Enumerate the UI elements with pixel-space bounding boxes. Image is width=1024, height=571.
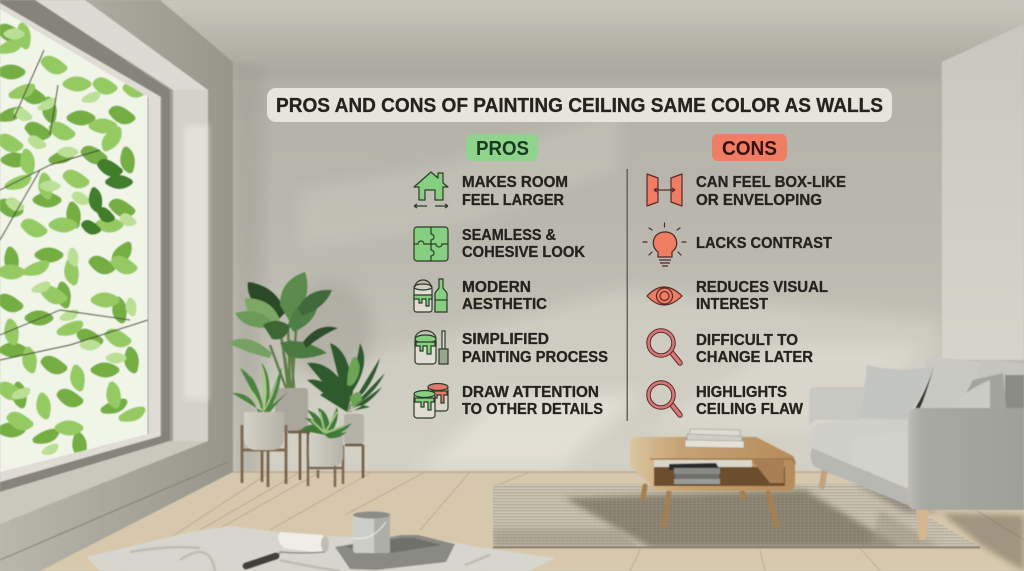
shelf books	[669, 463, 720, 484]
window recess top reveal	[35, 0, 208, 90]
con item: reduces visual interest	[647, 279, 828, 313]
pro item: seamless and cohesive look	[414, 227, 586, 261]
front arm and body	[908, 408, 1024, 510]
con item: reduces visual interest: REDUCES VISUAL	[696, 279, 828, 296]
icon: eye	[647, 287, 682, 305]
rug	[493, 484, 980, 548]
pro item: modern aesthetic	[414, 279, 547, 313]
panel: pros	[414, 134, 608, 418]
icon: light bulb	[643, 223, 686, 266]
paint roller	[246, 532, 329, 566]
icon: two paint cans	[414, 384, 448, 418]
con item: can feel box-like or enveloping: CAN FEEL BOX-LIKE	[696, 174, 846, 191]
front plant on stand	[300, 407, 352, 487]
con item: can feel box-like or enveloping: OR ENVELOPING	[696, 192, 822, 209]
title banner	[267, 88, 892, 122]
panel: cons	[643, 134, 846, 418]
left wall	[0, 0, 233, 571]
baseboard line	[0, 462, 228, 560]
icon: magnifying glass	[648, 382, 680, 415]
floor planks	[120, 472, 1024, 571]
pro item: modern aesthetic: AESTHETIC	[462, 296, 547, 313]
table legs	[643, 486, 777, 526]
mid foliage layer	[0, 26, 142, 432]
icon: paint can and brush	[414, 279, 447, 312]
pro item: simplified painting process: SIMPLIFIED	[462, 331, 549, 348]
table body	[630, 437, 795, 491]
branches	[0, 50, 148, 360]
pillow	[855, 365, 933, 421]
stacked books	[685, 429, 744, 448]
right plant	[307, 343, 385, 478]
pro item: simplified painting process: PAINTING PROCESS	[462, 349, 608, 366]
drop cloth	[87, 526, 555, 571]
window recess side reveal	[173, 90, 208, 441]
pros heading: PROS	[476, 138, 529, 160]
ceiling	[160, 0, 1024, 62]
con item: highlights ceiling flaw: HIGHLIGHTS	[696, 384, 787, 401]
potted plants group	[228, 272, 385, 487]
con item: lacks contrast: LACKS CONTRAST	[696, 235, 832, 252]
column divider	[626, 169, 628, 421]
cons heading: CONS	[722, 138, 777, 160]
icon: magnifying glass	[648, 330, 680, 363]
back cushions	[920, 358, 981, 410]
con item: difficult to change later	[648, 330, 813, 366]
con item: highlights ceiling flaw	[648, 382, 803, 418]
sofa	[809, 358, 1024, 571]
pro item: draw attention to other details: TO OTHER DETAILS	[462, 401, 603, 418]
dark foliage cluster	[84, 162, 130, 232]
front leg	[916, 510, 928, 540]
paint tray	[335, 535, 455, 570]
coffee table with books	[630, 429, 795, 526]
painting supplies on drop cloth	[87, 512, 555, 571]
pro item: makes room feel larger: FEEL LARGER	[462, 192, 564, 209]
pros heading	[466, 134, 538, 161]
pro item: draw attention to other details	[414, 384, 603, 418]
sofa back legs	[822, 468, 825, 486]
far arm	[809, 387, 866, 425]
window frame	[0, 0, 170, 492]
left plant on stand	[232, 363, 288, 487]
window sill	[0, 441, 208, 524]
icon: puzzle	[414, 227, 448, 261]
shadow	[850, 480, 1024, 571]
pro item: seamless and cohesive look: SEAMLESS &	[462, 227, 556, 244]
cons heading	[712, 134, 787, 161]
large plant	[228, 272, 338, 480]
seat cushions	[811, 419, 908, 482]
light foliage layer	[6, 31, 134, 452]
window with tree foliage	[0, 0, 150, 480]
pro item: seamless and cohesive look: COHESIVE LOOK	[462, 244, 586, 261]
icon: house with arrows	[414, 172, 448, 208]
icon: paint bucket and small brush	[415, 331, 448, 364]
con item: highlights ceiling flaw: CEILING FLAW	[696, 401, 803, 418]
paint can	[353, 512, 390, 553]
darker foliage layer	[0, 27, 135, 455]
pro item: modern aesthetic: MODERN	[462, 279, 531, 296]
pro item: simplified painting process	[415, 331, 608, 366]
con item: reduces visual interest: INTEREST	[696, 296, 768, 313]
floor	[40, 472, 1024, 571]
title: PROS AND CONS OF PAINTING CEILING SAME COLOR AS WALLS	[276, 95, 883, 117]
window mullion	[148, 97, 161, 436]
pro item: draw attention to other details: DRAW ATTENTION	[462, 384, 599, 401]
con item: can feel box-like or enveloping	[647, 174, 846, 209]
back wall	[233, 62, 942, 480]
con item: difficult to change later: DIFFICULT TO	[696, 332, 798, 349]
pro item: makes room feel larger	[414, 172, 568, 209]
con item: lacks contrast	[643, 223, 832, 266]
icon: closing walls with arrows	[647, 174, 682, 206]
con item: difficult to change later: CHANGE LATER	[696, 349, 813, 366]
right wall	[942, 24, 1024, 360]
pro item: makes room feel larger: MAKES ROOM	[462, 174, 568, 191]
